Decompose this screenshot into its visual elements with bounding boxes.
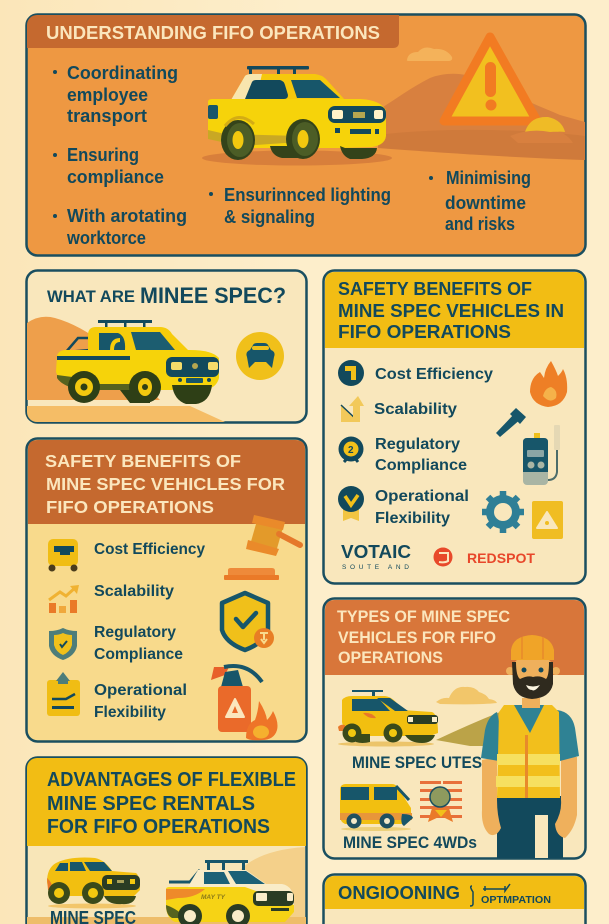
icon: check badge (338, 486, 364, 521)
icon: gear (482, 491, 524, 533)
list: benefits: Scalability (374, 401, 457, 418)
illustration: yellow mine spec truck (202, 66, 392, 166)
list: benefits: Regulatory (94, 624, 176, 641)
panel: safety benefits for FIFO operations (26, 438, 306, 742)
heading: UNDERSTANDING FIFO OPERATIONS (46, 22, 380, 43)
heading: VEHICLES FOR FIFO (338, 629, 496, 647)
list: benefits: Compliance (94, 646, 183, 663)
logo: votaic (341, 542, 411, 571)
icon: gavel (224, 515, 300, 580)
heading: WHAT ARE (47, 287, 135, 306)
label: mine spec 4WDs: MINE SPEC 4WDs (343, 833, 477, 852)
illustration: orange hill (27, 317, 160, 400)
icon: growth chart (49, 585, 79, 613)
heading: OPERATIONS (338, 649, 443, 667)
text block: right bullet (429, 168, 531, 234)
icon: compliance shield (49, 628, 77, 660)
text block: right bullet: Minimising (446, 168, 531, 188)
text block: middle bullet (209, 185, 391, 227)
heading (338, 278, 564, 342)
illustration: sun haze (240, 847, 305, 917)
illustration: worker in hi-vis vest (481, 635, 579, 858)
icon: large shield (222, 593, 274, 650)
text block: left bullet list: transport (67, 106, 147, 126)
list: benefits: Cost Efficiency (375, 366, 493, 383)
list: benefits (94, 541, 205, 721)
list: benefits: Regulatory (375, 436, 460, 453)
heading: ADVANTAGES OF FLEXIBLE (47, 768, 296, 791)
illustration: mountains (384, 74, 585, 136)
illustration: cloud (436, 687, 497, 704)
logo: redspot: REDSPOT (467, 550, 535, 566)
panel: advantages of flexible rentals (26, 758, 307, 924)
illustration: dune (436, 712, 510, 746)
text block: left bullet list: Ensuring (67, 145, 139, 165)
text block: left bullet list: worktorce (66, 228, 146, 248)
heading: optimisation tag: OPTMPATION (481, 895, 551, 906)
icon: number two badge: 2 (348, 445, 354, 456)
icon: van front (48, 539, 78, 572)
illustration: small yellow 4WD (47, 858, 140, 908)
list: benefits: Compliance (375, 457, 467, 474)
icon: desert shrub (510, 117, 573, 143)
heading band (325, 272, 584, 348)
heading: SAFETY BENEFITS OF (338, 278, 532, 299)
list: benefits: Flexibility (375, 510, 450, 527)
illustration: yellow ute (338, 690, 438, 746)
text block: left bullet list: employee (67, 85, 148, 105)
icon: clipboard (47, 672, 80, 716)
icon: warning sign (532, 501, 563, 539)
panel: what are mine spec (26, 270, 306, 422)
heading: FIFO OPERATIONS (46, 497, 214, 517)
heading: ONGIOONING (338, 882, 460, 903)
heading band (325, 876, 584, 909)
heading: MINE SPEC VEHICLES FOR (46, 474, 285, 494)
illustration: cloud (407, 48, 452, 61)
heading tab (27, 15, 399, 48)
heading (337, 608, 510, 667)
text block: right bullet: downtime (445, 193, 526, 213)
heading: TYPES OF MINE SPEC (337, 608, 510, 626)
text block: left bullet list: With arotating (67, 206, 187, 226)
illustration: yellow van (340, 784, 413, 831)
panel: understanding FIFO operations (26, 14, 586, 256)
list: benefits: Operational (375, 488, 469, 505)
icon: scalability arrow (341, 396, 364, 422)
heading: FOR FIFO OPERATIONS (47, 815, 270, 838)
logo: redspot (434, 548, 535, 566)
text block: right bullet: and risks (445, 214, 515, 234)
list: benefits: Operational (94, 682, 187, 699)
icon: number one (338, 360, 364, 386)
list: benefits: Scalability (94, 583, 174, 600)
heading: MINEE SPEC? (140, 283, 286, 308)
text block: middle bullet: & signaling (224, 207, 315, 227)
heading (45, 451, 285, 517)
illustration: yellow truck with stripe (56, 320, 219, 404)
icon: gas detector device (523, 425, 560, 485)
label: mine spec utes: MINE SPEC UTES (352, 753, 482, 772)
heading band (28, 440, 305, 524)
heading: optimisation tag (470, 884, 551, 906)
icon: flashlight (496, 408, 526, 437)
illustration: white and yellow 4WD: MAY TY (201, 894, 226, 901)
heading: MINE SPEC VEHICLES IN (338, 300, 564, 321)
panel: ongoing optimisation (324, 874, 586, 924)
text block: left bullet list: compliance (67, 167, 164, 187)
icon: flame (530, 361, 567, 407)
heading: FIFO OPERATIONS (338, 321, 511, 342)
icon: number two badge (338, 436, 364, 462)
heading: MINE SPEC RENTALS (47, 792, 255, 815)
icon: vehicle badge (236, 332, 284, 380)
text block: left bullet list (53, 63, 187, 248)
illustration: white and yellow 4WD (166, 860, 294, 924)
text block: left bullet list: Coordinating (67, 63, 178, 83)
heading (47, 768, 296, 838)
heading: SAFETY BENEFITS OF (45, 451, 241, 471)
list: benefits (374, 366, 493, 527)
panel: safety benefits in FIFO operations (324, 270, 586, 584)
text block: middle bullet: Ensurinnced lighting (224, 185, 391, 205)
list: benefits: Flexibility (94, 704, 166, 721)
logo: votaic: VOTAIC (341, 542, 411, 562)
panel: types of mine spec vehicles (324, 598, 586, 858)
logo: votaic: SOUTE AND (342, 564, 411, 571)
icon: warning triangle (444, 37, 537, 121)
heading band (27, 758, 307, 846)
list: benefits: Cost Efficiency (94, 541, 205, 558)
icon: fire extinguisher (211, 666, 278, 740)
heading (47, 283, 286, 308)
icon: medal with stripes (420, 781, 462, 822)
heading band (325, 600, 584, 675)
